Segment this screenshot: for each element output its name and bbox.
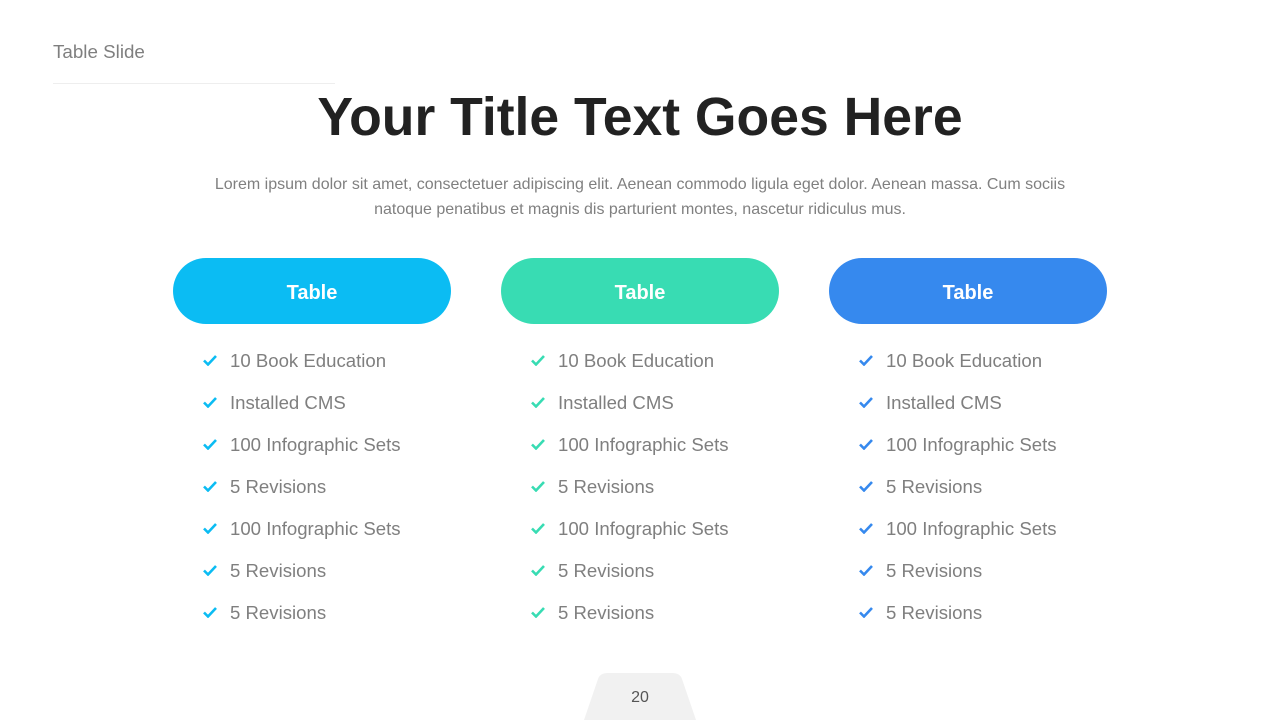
list 3: 10 Book Education [886, 350, 1042, 371]
list 2: 5 Revisions [558, 476, 654, 497]
page number tab: 20 [631, 689, 649, 706]
list 2: Installed CMS [558, 392, 674, 413]
list 3: 5 Revisions [886, 476, 982, 497]
panel: column 3 [829, 258, 1107, 623]
list 3: 100 Infographic Sets [886, 434, 1057, 455]
header label: Table Slide [53, 41, 145, 62]
header pill 2: Table [615, 282, 665, 304]
list 1: 5 Revisions [230, 602, 326, 623]
header pill 3 [829, 258, 1107, 324]
subtitle: Lorem ipsum dolor sit amet, consectetuer adipiscing elit. Aenean commodo ligula eget dolor. Aenean massa. Cum sociis natoque penatibus et magnis dis parturient montes, nascetur ridiculus mus. [215, 176, 1065, 218]
panel: column 1 [173, 258, 451, 623]
list 2: 10 Book Education [558, 350, 714, 371]
list 3: 5 Revisions [886, 602, 982, 623]
header pill 1: Table [287, 282, 337, 304]
list 2: 100 Infographic Sets [558, 518, 729, 539]
list 1: 5 Revisions [230, 476, 326, 497]
panel: column 2 [501, 258, 779, 623]
list 2: 5 Revisions [558, 602, 654, 623]
list 2: 100 Infographic Sets [558, 434, 729, 455]
list 1: Installed CMS [230, 392, 346, 413]
list 1: 5 Revisions [230, 560, 326, 581]
header pill 2 [501, 258, 779, 324]
title: Your Title Text Goes Here [317, 88, 963, 147]
list 3 [859, 350, 1057, 623]
list 3: 100 Infographic Sets [886, 518, 1057, 539]
list 2: 5 Revisions [558, 560, 654, 581]
list 2 [531, 350, 729, 623]
header pill 1 [173, 258, 451, 324]
page number tab [584, 673, 696, 720]
header pill 3: Table [943, 282, 993, 304]
list 1: 100 Infographic Sets [230, 434, 401, 455]
list 3: Installed CMS [886, 392, 1002, 413]
list 1: 100 Infographic Sets [230, 518, 401, 539]
list 1: 10 Book Education [230, 350, 386, 371]
list 1 [203, 350, 401, 623]
list 3: 5 Revisions [886, 560, 982, 581]
